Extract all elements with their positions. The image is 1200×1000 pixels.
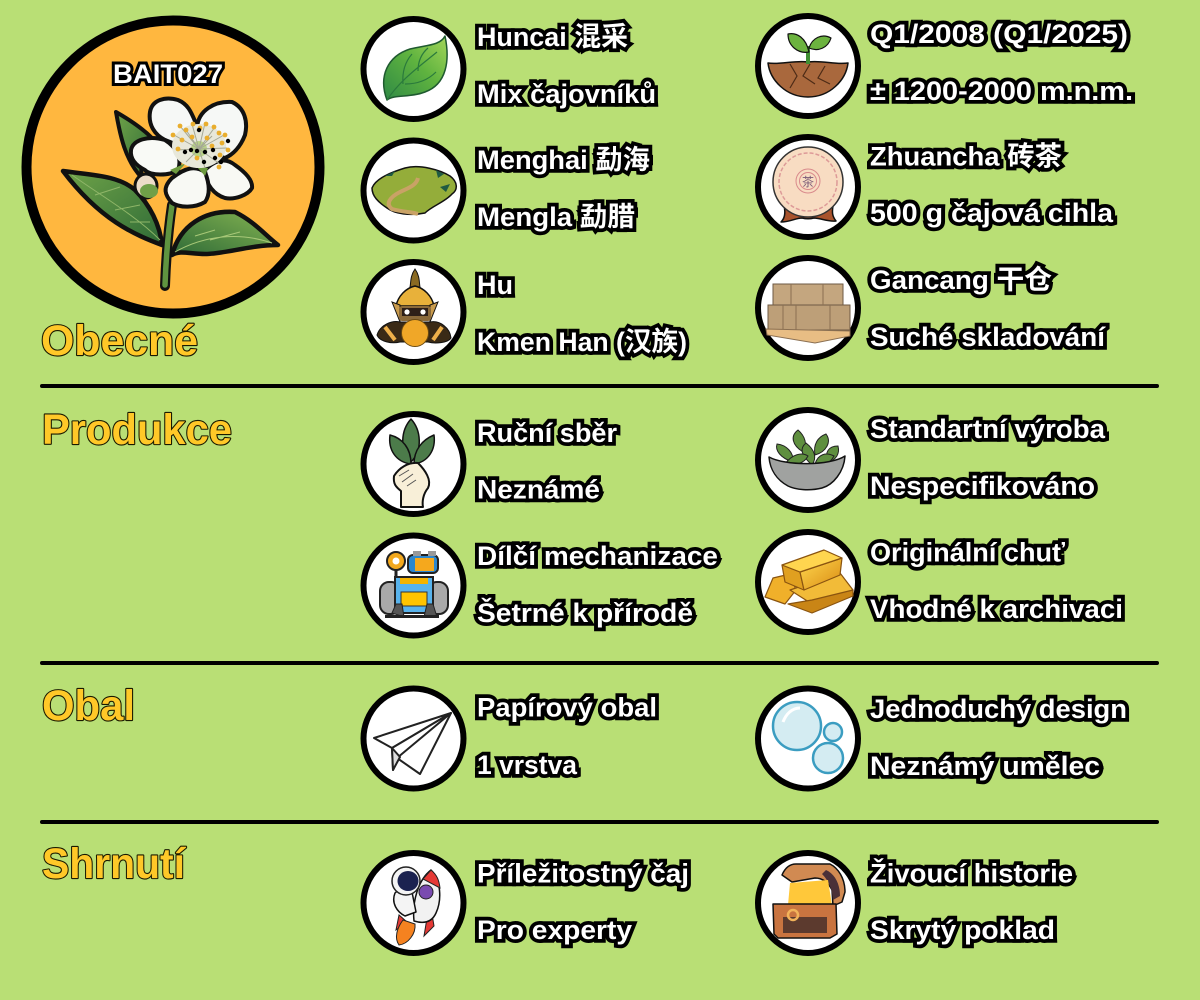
icon: guardian giant: [377, 269, 451, 346]
item: Papírový obal: [364, 688, 657, 788]
icon: tea cake on stand: [773, 147, 843, 222]
label: Zhuancha 砖茶: [870, 142, 1062, 172]
icon: boxes on pallet: [766, 284, 850, 343]
label: Jednoduchý design: [870, 694, 1127, 724]
item: Zhuancha: [758, 137, 1114, 237]
label: Mengla 勐腊: [477, 202, 635, 232]
item: Dílčí mechanizace: [364, 536, 718, 636]
item: Menghai: [364, 140, 650, 240]
label: Gancang 干仓: [870, 265, 1052, 295]
label: Nespecifikováno: [870, 471, 1095, 501]
item: Ruční sběr: [364, 414, 617, 514]
icon: tea cake on stand: 茶: [802, 174, 814, 189]
badge: BAIT027 flower: [26, 20, 320, 314]
item: Huncai: [364, 19, 656, 119]
badge code: BAIT027: [113, 59, 223, 89]
heading: Shrnutí: Shrnutí: [42, 841, 186, 888]
heading: Produkce: Produkce: [42, 407, 232, 454]
label: ± 1200-2000 m.n.m.: [870, 76, 1133, 106]
item: Příležitostný čaj: [364, 853, 689, 953]
icon: bubbles: [773, 702, 843, 773]
icon: machine: [380, 551, 448, 618]
label: Mix čajovníků: [477, 79, 656, 109]
heading: Obecné: Obecné: [41, 318, 198, 365]
label: Menghai 勐海: [477, 145, 650, 175]
icon: bowl of leaves: [769, 430, 845, 490]
item: Živoucí historie: [758, 853, 1073, 953]
divider: [42, 384, 1157, 388]
label: Skrytý poklad: [870, 915, 1055, 945]
label: Hu: [477, 270, 513, 300]
icon: treasure chest: [773, 864, 845, 938]
item: Originální chuť: [758, 532, 1123, 632]
label: 1 vrstva: [477, 750, 578, 780]
icon: hand holding leaves: [390, 419, 434, 507]
label: Standartní výroba: [870, 414, 1106, 444]
icon: leaf: [384, 36, 447, 100]
stamens: [171, 122, 230, 169]
icon: paper plane: [374, 713, 451, 774]
label: Q1/2008 (Q1/2025): [870, 19, 1128, 49]
label: Kmen Han (汉族): [477, 327, 687, 357]
divider: [42, 661, 1157, 665]
divider: [42, 820, 1157, 824]
label: Dílčí mechanizace: [477, 541, 718, 571]
item: Standartní výroba: [758, 410, 1106, 510]
label: Neznámé: [477, 475, 600, 505]
item: Hu: [364, 262, 687, 362]
label: Ruční sběr: [477, 418, 617, 448]
label: 500 g čajová cihla: [870, 198, 1114, 228]
label: Huncai 混采: [477, 22, 628, 52]
label: Neznámý umělec: [870, 751, 1100, 781]
label: Originální chuť: [870, 538, 1065, 568]
icon: astronaut on rocket: [392, 867, 440, 945]
item: Jednoduchý design: [758, 688, 1127, 788]
label: Živoucí historie: [870, 858, 1073, 888]
icon: seedling in soil: [768, 34, 848, 97]
label: Suché skladování: [870, 322, 1107, 352]
icon: gold bars: [765, 550, 853, 613]
label: Vhodné k archivaci: [870, 594, 1123, 624]
label: Příležitostný čaj: [477, 858, 689, 888]
icon: terrain: [372, 167, 456, 214]
label: Pro experty: [477, 915, 632, 945]
label: Papírový obal: [477, 692, 657, 722]
heading: Obal: Obal: [42, 683, 135, 730]
flower illustration: [63, 98, 278, 286]
label: Šetrné k přírodě: [477, 597, 693, 628]
item: Q1/2008: [758, 16, 1133, 116]
item: Gancang: [758, 258, 1107, 358]
